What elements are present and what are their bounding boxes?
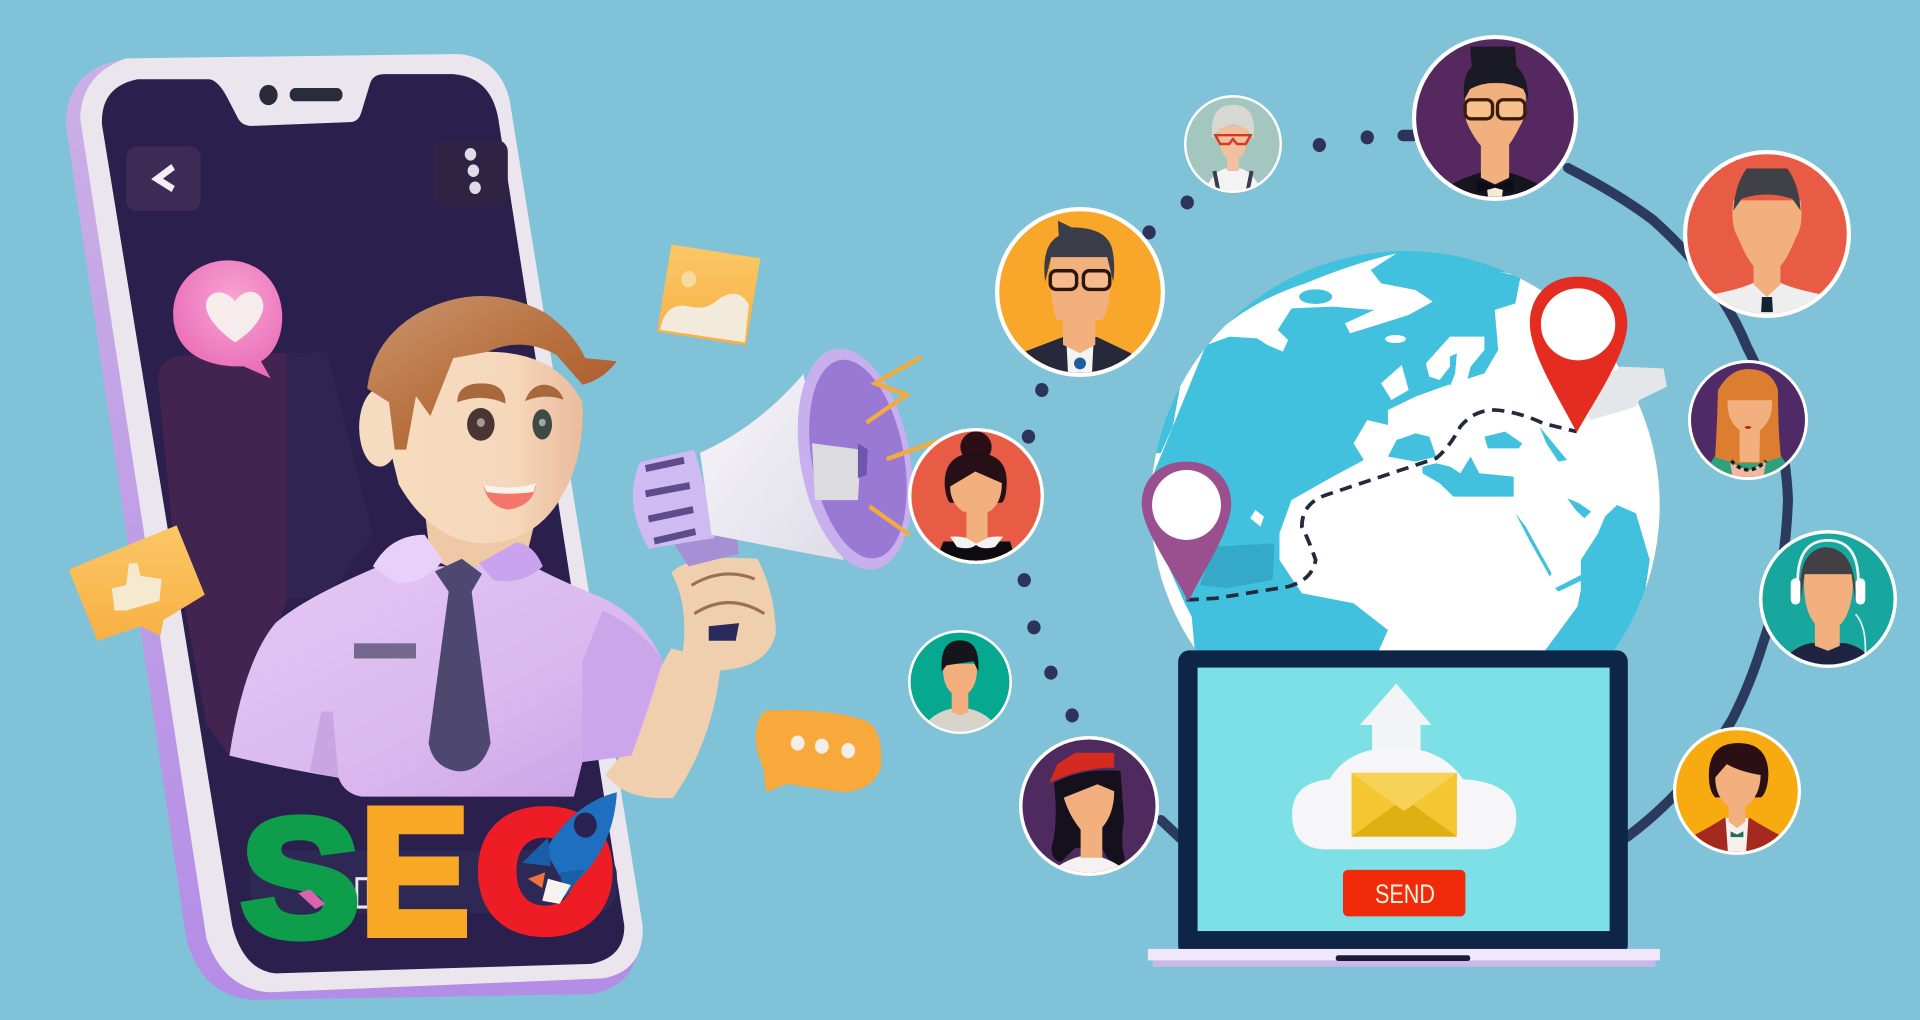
avatar: man on teal background	[908, 630, 1012, 734]
avatar: man on red background	[1683, 150, 1851, 318]
upload arrow	[1360, 684, 1431, 760]
collar	[373, 535, 443, 583]
dotted connection	[1018, 130, 1418, 722]
avatar: woman on amber background	[1673, 727, 1801, 855]
avatar: woman with dark bun	[908, 428, 1044, 564]
icon: heart bubble	[173, 260, 282, 378]
letter E: E	[360, 771, 469, 972]
icon: chat bubble	[756, 710, 881, 792]
neck	[425, 503, 539, 571]
icon: like card	[69, 525, 205, 641]
SEO letters	[241, 771, 617, 972]
avatar: support agent with headset	[1759, 530, 1897, 668]
envelope	[1351, 773, 1457, 837]
avatar: man with glasses and bow tie	[1412, 35, 1578, 201]
connection ring	[1161, 168, 1788, 838]
location pin: red	[1530, 277, 1627, 433]
head	[359, 388, 400, 467]
cloud	[1292, 747, 1516, 849]
mouth	[483, 483, 537, 510]
avatar: woman with orange hair	[1688, 360, 1808, 480]
icon: camera and speaker	[259, 85, 342, 105]
shirt	[229, 566, 663, 797]
letter S: S	[241, 784, 360, 971]
character: marketer	[229, 296, 776, 798]
icon: back button	[126, 147, 201, 211]
icon: image card	[657, 245, 760, 346]
phone body	[66, 54, 643, 1000]
icon: megaphone	[633, 337, 940, 641]
avatar: woman with red hat	[1019, 736, 1159, 876]
icon: rocket	[522, 792, 617, 904]
hair	[367, 296, 617, 450]
send label: SEND	[1375, 879, 1435, 909]
shipping route	[1186, 410, 1577, 600]
avatar: man with glasses on amber background	[995, 207, 1165, 377]
icon: menu button	[433, 140, 508, 207]
eyes and brows	[457, 383, 563, 404]
globe	[1142, 251, 1667, 650]
tie	[429, 559, 491, 771]
laptop body	[1148, 650, 1660, 967]
arm and hand	[605, 558, 776, 798]
illustration: phone, marketer and SEO	[66, 54, 940, 1000]
location pin: purple	[1142, 462, 1231, 602]
grey cloud	[1588, 367, 1667, 420]
illustration: laptop	[1018, 130, 1660, 967]
letter O: O	[477, 779, 613, 965]
continents	[1140, 253, 1670, 653]
send button	[1343, 870, 1465, 916]
avatar: grandmother with red glasses	[1184, 95, 1282, 193]
name badge	[354, 643, 416, 658]
